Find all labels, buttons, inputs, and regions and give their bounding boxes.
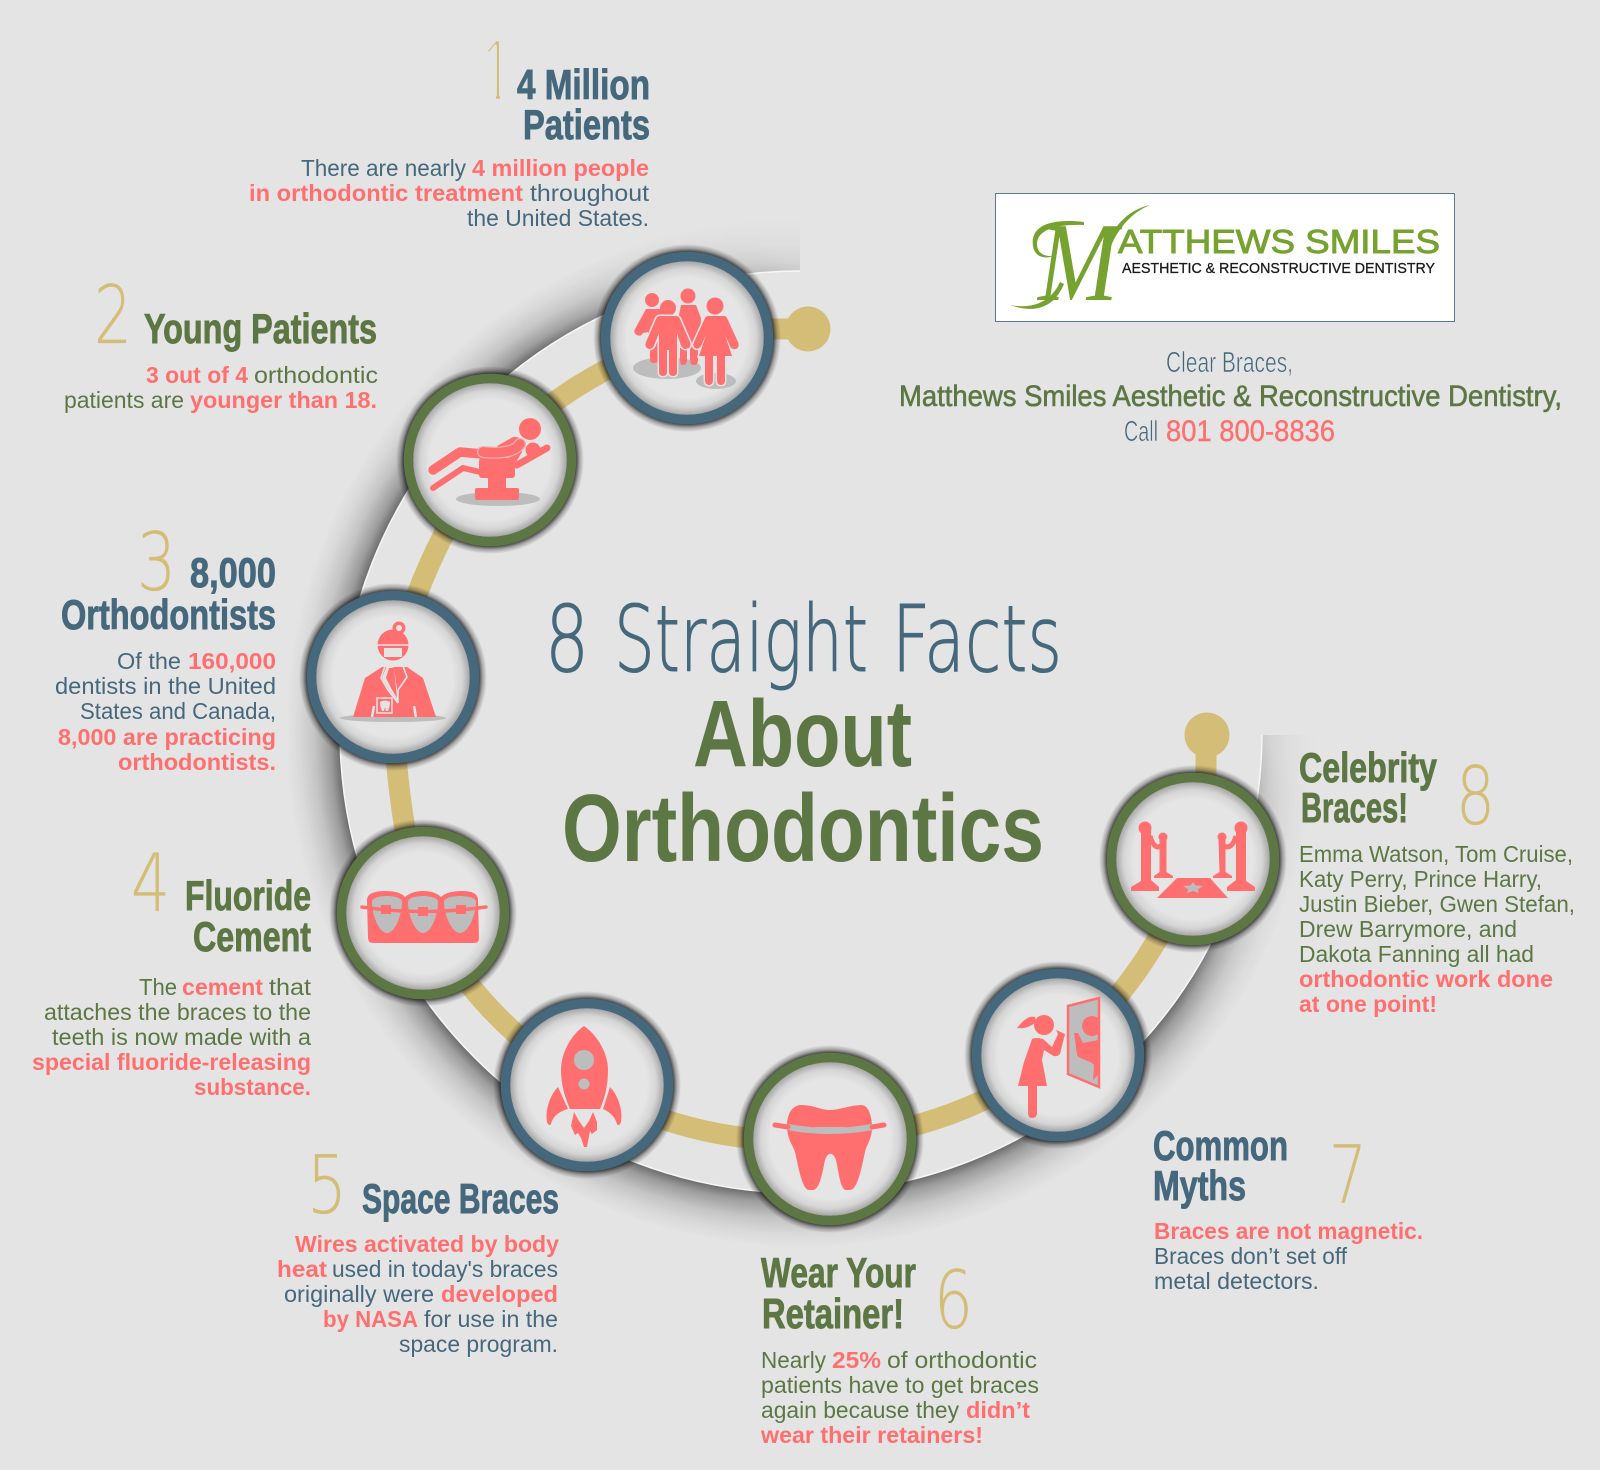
body text: the United States.: [467, 205, 649, 231]
body text: dentists in the United: [55, 673, 276, 699]
body text: developed: [441, 1281, 558, 1307]
body text: patients are: [64, 387, 184, 413]
heading: Celebrity Braces!: Braces!: [1301, 784, 1408, 831]
number 6: 6: [934, 1254, 973, 1347]
body text: Drew Barrymore, and: [1299, 916, 1517, 942]
body text: 4 million people: [472, 155, 649, 181]
logo box: [996, 194, 1454, 325]
heading: 4 Million Patients: [517, 61, 650, 148]
body text: [32, 974, 312, 1100]
body text: didn’t: [966, 1397, 1030, 1423]
heading: Space Braces: Space Braces: [362, 1175, 559, 1222]
body text: There are nearly: [301, 155, 466, 181]
heading: Fluoride Cement: Cement: [193, 913, 311, 960]
body text: orthodontists.: [118, 749, 276, 775]
panel: fact 7: [1153, 1122, 1423, 1294]
heading: Celebrity Braces!: Celebrity: [1299, 744, 1437, 791]
number 8: 8: [1456, 750, 1495, 843]
heading: Fluoride Cement: [185, 872, 311, 960]
logo box: AESTHETIC & RECONSTRUCTIVE DENTISTRY: [1122, 260, 1435, 277]
heading: 4 Million Patients: 4 Million: [517, 61, 650, 108]
body text: [249, 155, 649, 231]
body text: 3 out of 4: [146, 362, 248, 388]
heading: 8,000 Orthodontists: [61, 549, 276, 638]
body text: by NASA: [323, 1306, 418, 1332]
body text: Braces are not magnetic.: [1154, 1218, 1423, 1244]
title: [545, 586, 1062, 882]
body text: space program.: [399, 1331, 558, 1357]
body text: again because they: [761, 1397, 959, 1423]
body text: in orthodontic treatment: [249, 180, 523, 206]
body text: used in today's braces: [332, 1256, 558, 1282]
panel: fact 1: [249, 21, 650, 231]
title: About: [693, 681, 912, 787]
heading: Fluoride Cement: Fluoride: [185, 872, 311, 919]
body text: substance.: [194, 1074, 311, 1100]
number 3: 3: [137, 516, 176, 609]
number 2: 2: [94, 269, 132, 362]
panel: fact 2: [64, 269, 378, 413]
title: 8: [545, 586, 589, 693]
title: Straight: [614, 586, 868, 693]
contact text: 801 800-8836: [1166, 415, 1335, 448]
body text: orthodontic: [254, 362, 378, 388]
body text: heat: [277, 1256, 327, 1282]
logo box: M: [1036, 201, 1123, 325]
heading: Common Myths: Common: [1153, 1122, 1288, 1169]
body text: [277, 1231, 559, 1357]
body text: throughout: [530, 180, 649, 206]
body text: Of the: [117, 648, 181, 674]
body text: [55, 648, 276, 775]
number 5: 5: [307, 1139, 347, 1232]
icon circle 5: rocket: [493, 991, 681, 1179]
body text: of orthodontic: [887, 1347, 1037, 1373]
body text: [64, 362, 378, 413]
number 7: 7: [1329, 1129, 1367, 1222]
heading: Common Myths: [1153, 1122, 1288, 1209]
body text: States and Canada,: [80, 698, 276, 724]
body text: [760, 1347, 1039, 1448]
heading: Wear Your Retainer!: Retainer!: [762, 1290, 904, 1337]
body text: attaches the braces to the: [44, 999, 311, 1025]
logo box: ATTHEWS SMILES: [1118, 223, 1440, 260]
icon circle 6: tooth with retainer: [736, 1045, 924, 1233]
body text: The: [139, 974, 177, 1000]
body text: orthodontic work done: [1299, 966, 1553, 992]
body text: originally were: [284, 1281, 434, 1307]
central disc with soft shadow: [286, 217, 1316, 1247]
body text: at one point!: [1299, 991, 1437, 1017]
body text: special fluoride-releasing: [32, 1049, 311, 1075]
panel: fact 6: [760, 1249, 1039, 1448]
heading: Young Patients: Young Patients: [144, 305, 377, 352]
body text: teeth is now made with a: [52, 1024, 312, 1050]
contact text: [899, 347, 1562, 448]
heading: 8,000 Orthodontists: Orthodontists: [61, 591, 276, 638]
heading: Celebrity Braces!: [1299, 744, 1437, 831]
gold timeline path: [393, 306, 1230, 1141]
number 1: 1: [482, 21, 512, 121]
panel: fact 4: [32, 837, 312, 1100]
icon circle 2: dental chair: [396, 366, 584, 554]
icon circle 1: patients group: [593, 244, 781, 432]
panel: fact 5: [277, 1139, 559, 1357]
number 1: [482, 21, 514, 121]
contact text: Call: [1124, 416, 1158, 448]
body text: Katy Perry, Prince Harry,: [1299, 866, 1542, 892]
body text: Wires activated by body: [295, 1231, 559, 1257]
body text: patients have to get braces: [761, 1372, 1039, 1398]
body text: 25%: [832, 1347, 881, 1373]
body text: for use in the: [424, 1306, 558, 1332]
icon circle 8: red carpet: [1099, 765, 1287, 953]
panel: fact 8: [1299, 744, 1575, 1017]
title: Orthodontics: [562, 775, 1044, 882]
panel: fact 3: [55, 516, 276, 775]
body text: [1154, 1218, 1423, 1294]
body text: [1299, 841, 1575, 1017]
number 4: 4: [131, 837, 170, 930]
body text: 8,000 are practicing: [58, 724, 276, 750]
body text: Emma Watson, Tom Cruise,: [1299, 841, 1573, 867]
title: Facts: [892, 586, 1062, 693]
body text: metal detectors.: [1154, 1268, 1319, 1294]
contact text: Clear Braces,: [1166, 347, 1293, 379]
heading: Wear Your Retainer!: Wear Your: [761, 1249, 916, 1296]
icon circle 7: girl at mirror: [964, 961, 1152, 1149]
heading: Wear Your Retainer!: [761, 1249, 916, 1337]
body text: Dakota Fanning all had: [1299, 941, 1534, 967]
heading: 4 Million Patients: Patients: [523, 101, 650, 148]
body text: that: [269, 974, 311, 1000]
icon circle 4: braces on teeth: [329, 819, 517, 1007]
heading: Common Myths: Myths: [1153, 1162, 1246, 1209]
body text: younger than 18.: [190, 387, 377, 413]
body text: cement: [182, 974, 263, 1000]
body text: wear their retainers!: [760, 1422, 983, 1448]
body text: 160,000: [188, 648, 276, 674]
body text: Nearly: [761, 1347, 826, 1373]
body text: Braces don’t set off: [1154, 1243, 1347, 1269]
heading: 8,000 Orthodontists: 8,000: [190, 549, 276, 596]
icon circle 3: orthodontist: [299, 583, 487, 771]
body text: Justin Bieber, Gwen Stefan,: [1299, 891, 1575, 917]
